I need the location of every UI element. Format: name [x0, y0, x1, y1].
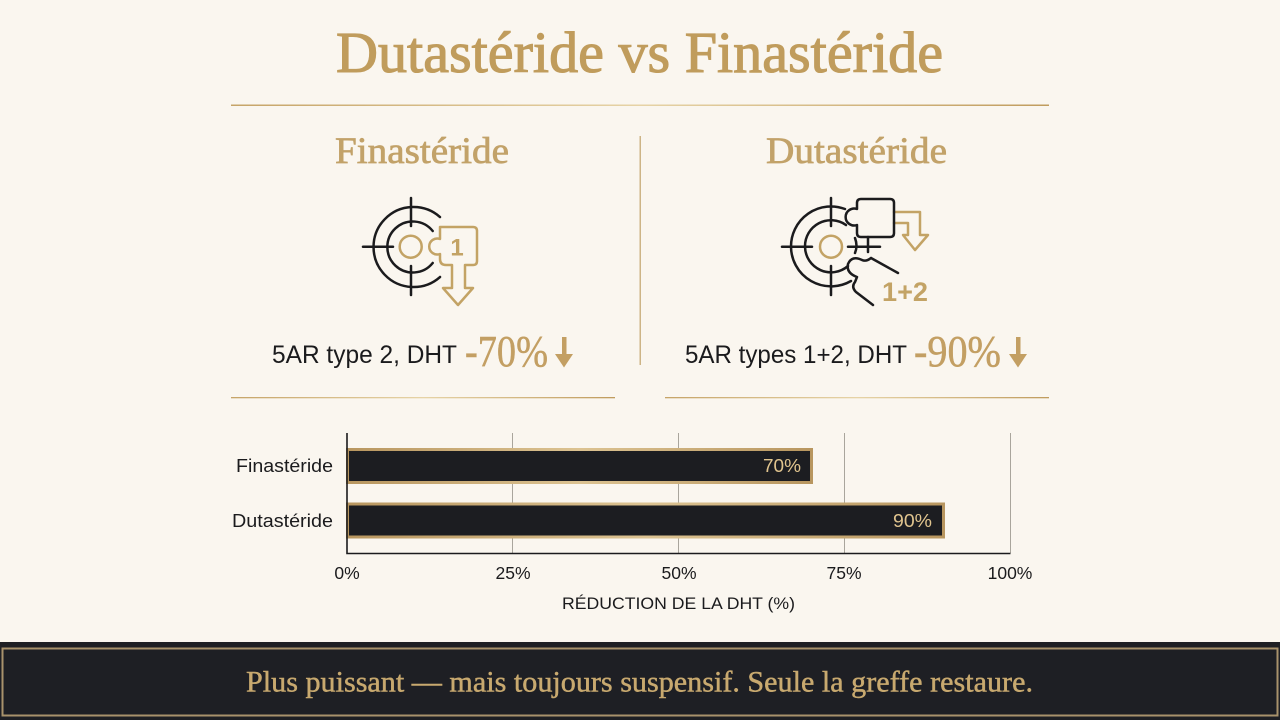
axis tick labels: 25% — [495, 563, 531, 583]
bar: finasteride 70% — [346, 448, 813, 484]
heading: finasteride: Finastéride — [335, 131, 509, 172]
bar: dutasteride 90%: 90% — [893, 511, 932, 531]
axis tick labels: 0% — [334, 563, 360, 583]
axis tick labels: 50% — [661, 563, 697, 583]
stat: dutasteride DHT reduction: 5AR types 1+2, DHT — [685, 341, 907, 369]
axis title: RÉDUCTION DE LA DHT (%) — [562, 594, 795, 613]
category labels — [232, 456, 333, 531]
icon: down arrow — [1009, 337, 1027, 368]
stat: dutasteride DHT reduction — [685, 327, 1027, 376]
icon: target with two enzymes and down arrow: 1+2 — [882, 277, 928, 307]
bar: finasteride 70%: 70% — [763, 456, 801, 476]
axis tick labels: 100% — [988, 563, 1032, 583]
stat: dutasteride DHT reduction: -90% — [914, 327, 1001, 376]
title: Dutastéride vs Finastéride — [336, 20, 943, 85]
panel: finasteride — [272, 131, 573, 376]
bar chart — [232, 433, 1032, 613]
stat: finasteride DHT reduction: 5AR type 2, DHT — [272, 341, 457, 369]
bar: dutasteride 90% — [346, 502, 945, 538]
icon: down arrow — [555, 337, 573, 368]
icon: target with type 1 enzyme and down arrow — [363, 198, 477, 305]
stat: finasteride DHT reduction — [272, 327, 573, 376]
heading: dutasteride: Dutastéride — [766, 131, 947, 172]
axis tick labels — [334, 563, 1032, 583]
axis tick labels: 75% — [826, 563, 862, 583]
bottom banner — [0, 642, 1280, 720]
icon: target with two enzymes and down arrow — [782, 198, 928, 307]
banner text: Plus puissant — mais toujours suspensif. Seule la greffe restaure. — [246, 666, 1033, 698]
category labels: Finastéride — [236, 456, 333, 476]
panel: dutasteride — [685, 131, 1027, 376]
stat: finasteride DHT reduction: -70% — [465, 327, 548, 376]
category labels: Dutastéride — [232, 511, 333, 531]
icon: target with type 1 enzyme and down arrow: 1 — [450, 234, 464, 262]
